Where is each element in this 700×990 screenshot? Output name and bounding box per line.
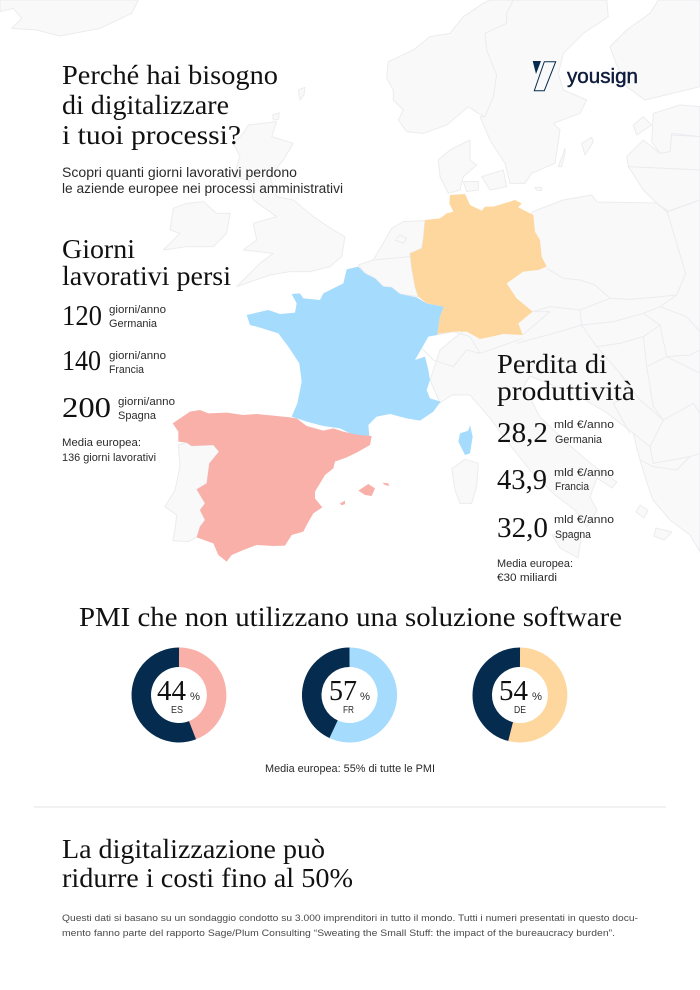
stat: Francia 43,9: Francia bbox=[555, 481, 590, 493]
donut: Francia 57% bbox=[312, 657, 387, 733]
stat: Spagna 32,0 bbox=[497, 513, 614, 544]
heading: perdita di produttività bbox=[497, 349, 635, 406]
donut: Spagna 44% bbox=[141, 657, 217, 733]
title bbox=[62, 60, 278, 150]
stat: Germania 28,2: 28,2 bbox=[497, 418, 548, 449]
stat: Germania 28,2 bbox=[497, 418, 614, 449]
donut: Germania 54%: 54 bbox=[499, 676, 528, 707]
stat: Francia 43,9 bbox=[497, 465, 614, 496]
heading: conclusione: La digitalizzazione può bbox=[62, 834, 325, 864]
stat: Germania 120: 120 bbox=[62, 301, 102, 332]
stat: Francia 140: 140 bbox=[62, 346, 101, 377]
note: media europea perdita: Media europea: bbox=[497, 558, 573, 570]
heading: PMI: PMI che non utilizzano una soluzione software bbox=[79, 602, 622, 632]
map: Germany bbox=[410, 194, 547, 339]
map: Spain bbox=[173, 410, 389, 562]
map: Sicily and Greek islands bbox=[552, 505, 672, 558]
note: media europea giorni: 136 giorni lavorativi bbox=[62, 452, 156, 464]
map: Corsica bbox=[458, 425, 473, 455]
donut: Francia 57%: % bbox=[360, 691, 370, 703]
heading: perdita di produttività: produttività bbox=[497, 376, 635, 406]
heading: conclusione bbox=[62, 834, 353, 893]
footnote: Questi dati si basano su un sondaggio condotto su 3.000 imprenditori in tutto il mondo. Tutti i numeri presentati in questo docu- bbox=[62, 913, 638, 924]
stat: Spagna 200: Spagna bbox=[118, 410, 157, 422]
stat: Germania 120: Germania bbox=[109, 318, 158, 330]
donut: Germania 54%: DE bbox=[514, 704, 526, 716]
heading: conclusione: ridurre i costi fino al 50% bbox=[62, 863, 353, 893]
stat: Spagna 32,0: Spagna bbox=[555, 529, 592, 541]
footnote bbox=[62, 913, 638, 939]
donut: Francia 57%: 57 bbox=[329, 676, 357, 707]
background map: neighbouring countries bbox=[0, 0, 700, 558]
subtitle: Scopri quanti giorni lavorativi perdono bbox=[62, 165, 297, 180]
stat: Francia 43,9: mld €/anno bbox=[554, 467, 614, 479]
stat: Spagna 200 bbox=[62, 393, 175, 424]
note: media europea giorni bbox=[62, 437, 156, 464]
stat: Germania 28,2: mld €/anno bbox=[554, 419, 614, 431]
stat: Spagna 200: giorni/anno bbox=[118, 396, 175, 408]
donut: Spagna 44%: 44 bbox=[157, 676, 186, 707]
stat: Francia 140: Francia bbox=[109, 364, 145, 376]
note: media europea perdita bbox=[497, 558, 573, 584]
stat: Spagna 32,0: 32,0 bbox=[497, 513, 548, 544]
title: i tuoi processi? bbox=[62, 120, 241, 150]
donut: Francia 57%: FR bbox=[343, 704, 354, 716]
stat: Francia 140: giorni/anno bbox=[109, 350, 166, 362]
stat: Francia 140 bbox=[62, 346, 166, 377]
heading: perdita di produttività: Perdita di bbox=[497, 349, 607, 379]
logo: yousign: yousign bbox=[567, 66, 638, 88]
stat: Germania 120 bbox=[62, 301, 166, 332]
note: media europea PMI: Media europea: 55% di tutte le PMI bbox=[265, 763, 435, 775]
subtitle: le aziende europee nei processi amministrativi bbox=[62, 181, 343, 196]
stat: Germania 120: giorni/anno bbox=[109, 304, 166, 316]
note: media europea giorni: Media europea: bbox=[62, 437, 141, 449]
stat: Francia 43,9: 43,9 bbox=[497, 465, 547, 496]
map: France bbox=[247, 267, 473, 455]
donut: Spagna 44%: % bbox=[190, 691, 200, 703]
stat: Germania 28,2: Germania bbox=[555, 434, 603, 446]
subtitle bbox=[62, 165, 343, 196]
heading: giorni lavorativi persi bbox=[62, 234, 231, 291]
note: media europea perdita: €30 miliardi bbox=[497, 572, 557, 584]
panel: perdita di produttività bbox=[497, 349, 635, 584]
title: Perché hai bisogno bbox=[62, 60, 278, 90]
mainland: Poland, Alps, Italy, Balkans bbox=[430, 195, 700, 552]
donut: Germania 54% bbox=[482, 657, 558, 733]
stat: Spagna 32,0: mld €/anno bbox=[554, 514, 614, 526]
stat: Spagna 200: 200 bbox=[62, 393, 111, 424]
donut: Germania 54%: % bbox=[532, 691, 542, 703]
footnote: mento fanno parte del rapporto Sage/Plum Consulting “Sweating the Small Stuff: the impact of the bureaucracy burden”. bbox=[62, 928, 615, 939]
panel: giorni lavorativi persi bbox=[62, 234, 231, 464]
title: di digitalizzare bbox=[62, 90, 229, 120]
donut: Spagna 44%: ES bbox=[171, 704, 183, 716]
heading: giorni lavorativi persi: Giorni bbox=[62, 234, 135, 264]
logo: yousign bbox=[533, 61, 638, 91]
heading: giorni lavorativi persi: lavorativi persi bbox=[62, 261, 231, 291]
